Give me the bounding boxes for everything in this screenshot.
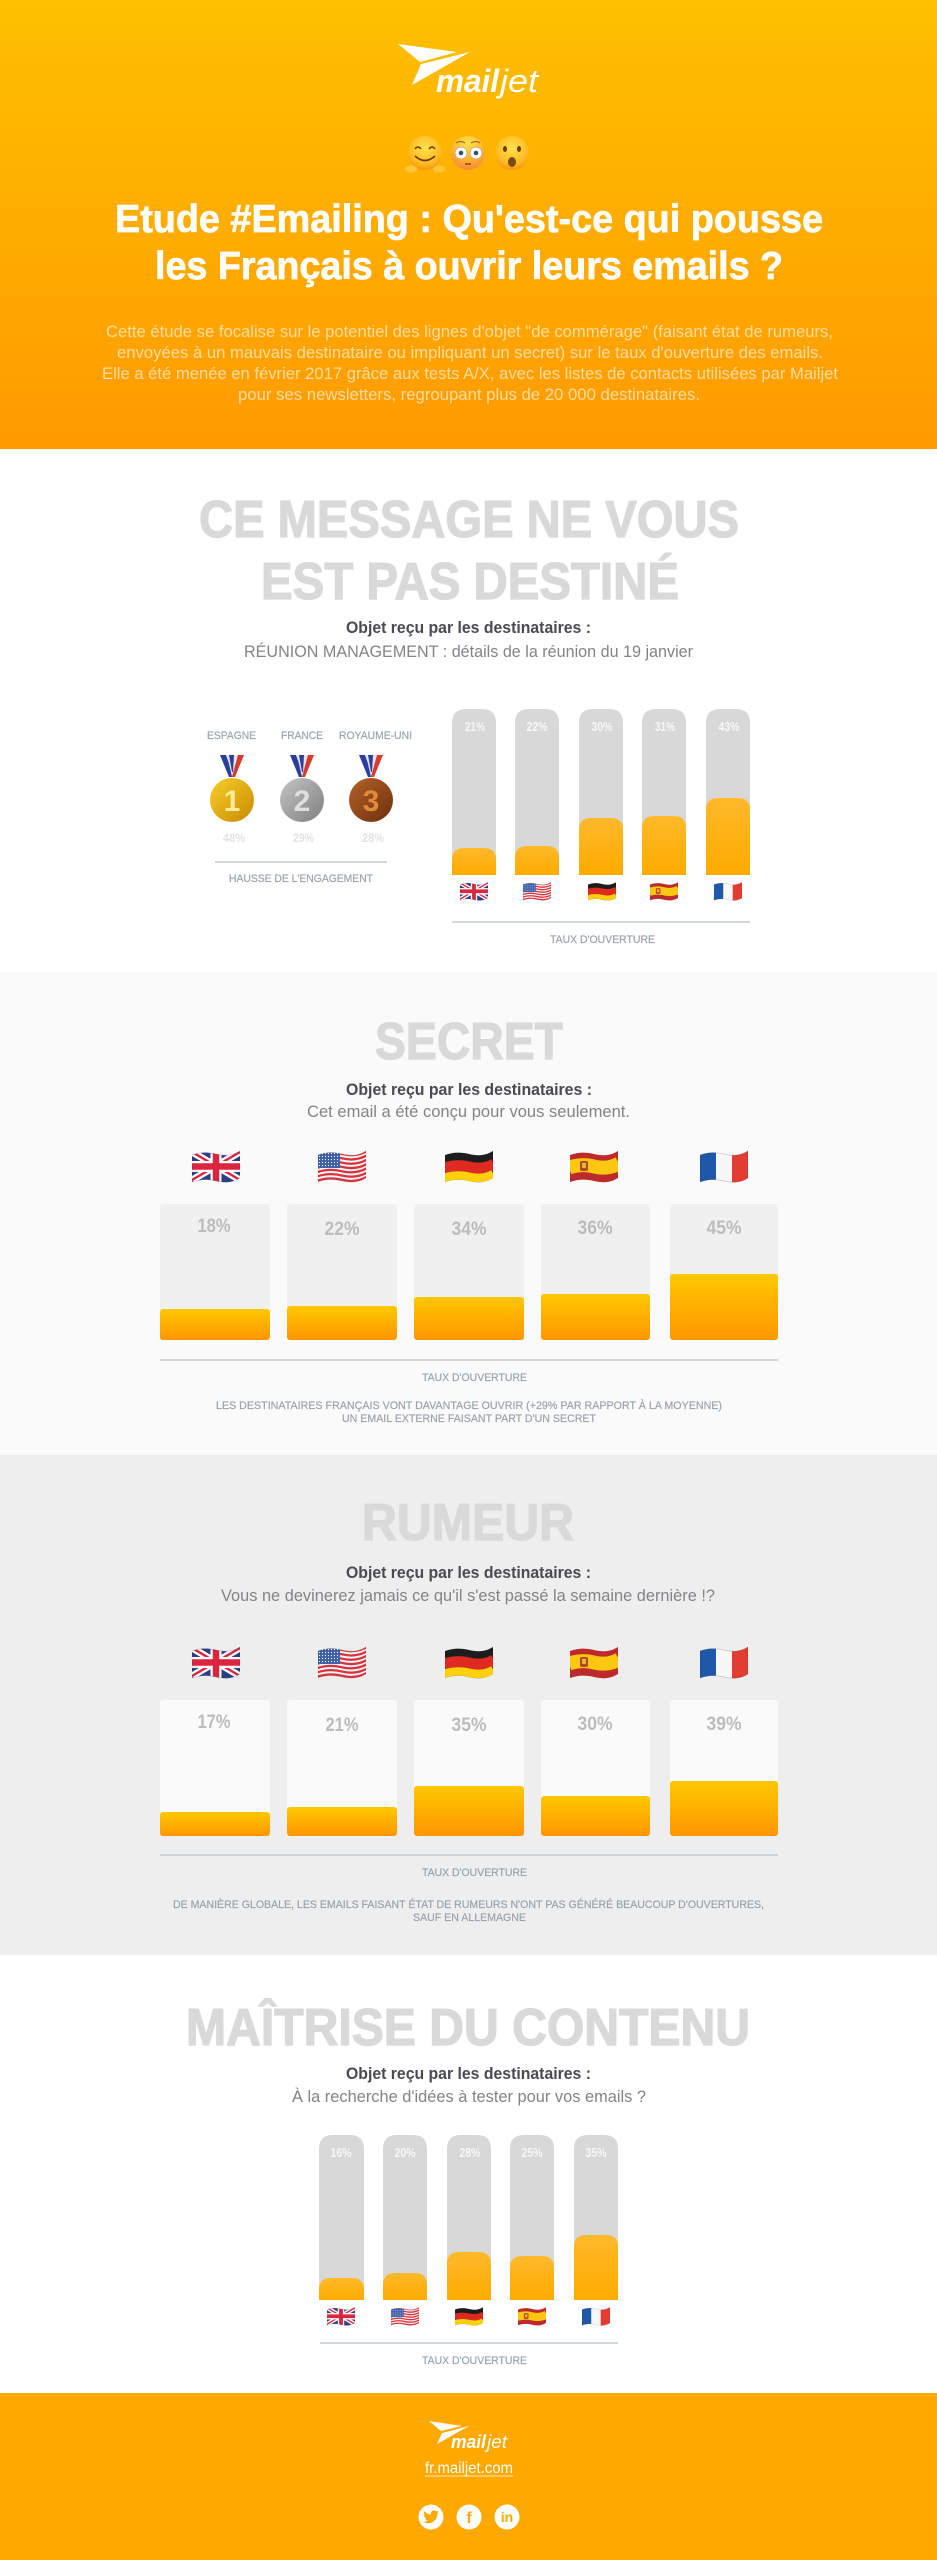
panel: footer — [0, 2393, 937, 2560]
subject line: Vous ne devinerez jamais ce qu'il s'est passé la semaine dernière !? — [221, 1586, 715, 1605]
medal: Espagne — [207, 730, 256, 845]
bar chart: taux d'ouverture 3: 35% — [452, 1715, 487, 1736]
medal: Royaume-Uni: 28% — [362, 831, 384, 845]
subject line: Objet reçu par les destinataires : — [346, 1080, 592, 1099]
bar chart: taux d'ouverture 4: 20% — [394, 2145, 416, 2160]
bar chart: taux d'ouverture 1: 22% — [526, 719, 548, 734]
bar chart: taux d'ouverture 2: 22% — [324, 1219, 360, 1240]
intro text: Cette étude se focalise sur le potentiel des lignes d'objet "de commérage" (faisant état de rumeurs, — [106, 322, 833, 341]
medal: France: 2 — [294, 785, 310, 818]
bar chart: taux d'ouverture 1: 43% — [718, 719, 740, 734]
icon: three emoji faces — [405, 136, 529, 172]
subject line: Objet reçu par les destinataires : — [346, 1563, 591, 1582]
medals: hausse de l'engagement — [207, 730, 412, 885]
heading: ce message: CE MESSAGE NE VOUS — [199, 491, 739, 549]
subject line — [221, 1563, 715, 1605]
heading: ce message — [199, 491, 739, 611]
note: rumeur: SAUF EN ALLEMAGNE — [413, 1912, 526, 1924]
bar chart: taux d'ouverture 3: 39% — [706, 1714, 742, 1735]
medal: France: 29% — [293, 831, 314, 845]
heading: rumeur: RUMEUR — [362, 1494, 574, 1552]
note: secret: UN EMAIL EXTERNE FAISANT PART D'UN SECRET — [342, 1413, 596, 1425]
bar chart: taux d'ouverture 4: 28% — [460, 2145, 481, 2160]
panel: ce message ne vous est pas destiné — [0, 449, 937, 972]
subject line — [244, 618, 693, 661]
note: rumeur — [173, 1898, 764, 1924]
flags row — [192, 1645, 748, 1679]
medal: France: FRANCE — [281, 730, 323, 742]
bar chart: taux d'ouverture 3: 30% — [578, 1714, 613, 1735]
bar chart: taux d'ouverture 1: 30% — [592, 719, 613, 734]
intro text: envoyées à un mauvais destinataire ou impliquant un secret) sur le taux d'ouverture des emails. — [117, 343, 823, 362]
bar chart: taux d'ouverture 2: 45% — [706, 1218, 742, 1239]
intro text: Elle a été menée en février 2017 grâce aux tests A/X, avec les listes de contacts utilisées par Mailjet — [102, 364, 838, 383]
note: secret — [216, 1399, 722, 1425]
heading: ce message: EST PAS DESTINÉ — [261, 553, 679, 611]
logo: mailjet: mail — [436, 63, 500, 99]
bar chart: taux d'ouverture 3: 17% — [198, 1712, 231, 1733]
heading: secret: SECRET — [375, 1013, 563, 1071]
panel: header — [0, 0, 937, 449]
icon: linkedin — [494, 2504, 520, 2530]
logo: mailjet footer: jet — [484, 2432, 508, 2452]
caption: hausse de l'engagement: HAUSSE DE L'ENGAGEMENT — [229, 873, 373, 885]
note: secret: LES DESTINATAIRES FRANÇAIS VONT DAVANTAGE OUVRIR (+29% PAR RAPPORT À LA MOYENNE) — [216, 1399, 722, 1412]
subject line: RÉUNION MANAGEMENT : détails de la réunion du 19 janvier — [244, 642, 693, 661]
bar chart: taux d'ouverture 2: 36% — [578, 1218, 613, 1239]
intro text — [102, 322, 838, 404]
medal: France — [280, 730, 324, 845]
bar chart: taux d'ouverture 3 — [160, 1700, 778, 1879]
bar chart: taux d'ouverture 4: 16% — [330, 2145, 352, 2160]
medal: Espagne: 1 — [224, 785, 240, 818]
subject line: Objet reçu par les destinataires : — [346, 2064, 591, 2083]
bar chart: taux d'ouverture 1: TAUX D'OUVERTURE — [550, 934, 655, 946]
intro text: pour ses newsletters, regroupant plus de 20 000 destinataires. — [238, 385, 700, 404]
panel: secret — [0, 972, 937, 1455]
medal: Royaume-Uni — [339, 730, 412, 845]
logo: mailjet footer: mail — [451, 2432, 487, 2452]
bar chart: taux d'ouverture 3: TAUX D'OUVERTURE — [422, 1867, 527, 1879]
title: les Français à ouvrir leurs emails ? — [155, 245, 783, 288]
heading: maîtrise du contenu: MAÎTRISE DU CONTENU — [186, 1998, 750, 2057]
bar chart: taux d'ouverture 2: 34% — [452, 1219, 487, 1240]
panel: maîtrise du contenu — [0, 1955, 937, 2393]
bar chart: taux d'ouverture 4: 35% — [586, 2145, 607, 2160]
panel: rumeur — [0, 1455, 937, 1955]
bar chart: taux d'ouverture 4 — [319, 2135, 618, 2367]
bar chart: taux d'ouverture 1: 21% — [465, 719, 485, 734]
link: fr.mailjet.com: fr.mailjet.com — [425, 2460, 513, 2477]
bar chart: taux d'ouverture 3: 21% — [326, 1715, 359, 1736]
icon: facebook — [456, 2504, 482, 2530]
subject line: Objet reçu par les destinataires : — [346, 618, 591, 637]
medal: Royaume-Uni: ROYAUME-UNI — [339, 730, 412, 742]
logo: mailjet: jet — [496, 63, 539, 99]
medal: Royaume-Uni: 3 — [363, 785, 379, 818]
logo: mailjet footer — [429, 2421, 508, 2452]
bar chart: taux d'ouverture 1 — [452, 709, 750, 946]
bar chart: taux d'ouverture 4: TAUX D'OUVERTURE — [422, 2355, 527, 2367]
icon: facebook: f — [466, 2510, 472, 2527]
note: rumeur: DE MANIÈRE GLOBALE, LES EMAILS FAISANT ÉTAT DE RUMEURS N'ONT PAS GÉNÉRÉ BEAUCOUP D'OUVERTURES, — [173, 1898, 764, 1911]
bar chart: taux d'ouverture 2: TAUX D'OUVERTURE — [422, 1372, 527, 1384]
title: Etude #Emailing : Qu'est-ce qui pousse — [115, 198, 823, 241]
medal: Espagne: 48% — [223, 831, 245, 845]
bar chart: taux d'ouverture 1: 31% — [655, 719, 675, 734]
subject line — [292, 2064, 646, 2106]
title — [115, 198, 823, 288]
icon: twitter — [418, 2504, 444, 2530]
bar chart: taux d'ouverture 2 — [160, 1204, 778, 1384]
subject line: Cet email a été conçu pour vous seulement. — [307, 1102, 630, 1121]
bar chart: taux d'ouverture 4: 25% — [522, 2145, 543, 2160]
subject line: À la recherche d'idées à tester pour vos emails ? — [292, 2087, 646, 2106]
icon: linkedin: in — [501, 2509, 513, 2525]
flags row — [192, 1149, 748, 1183]
subject line — [307, 1080, 630, 1121]
logo: mailjet — [398, 44, 539, 99]
bar chart: taux d'ouverture 2: 18% — [198, 1216, 231, 1237]
medal: Espagne: ESPAGNE — [207, 730, 256, 742]
